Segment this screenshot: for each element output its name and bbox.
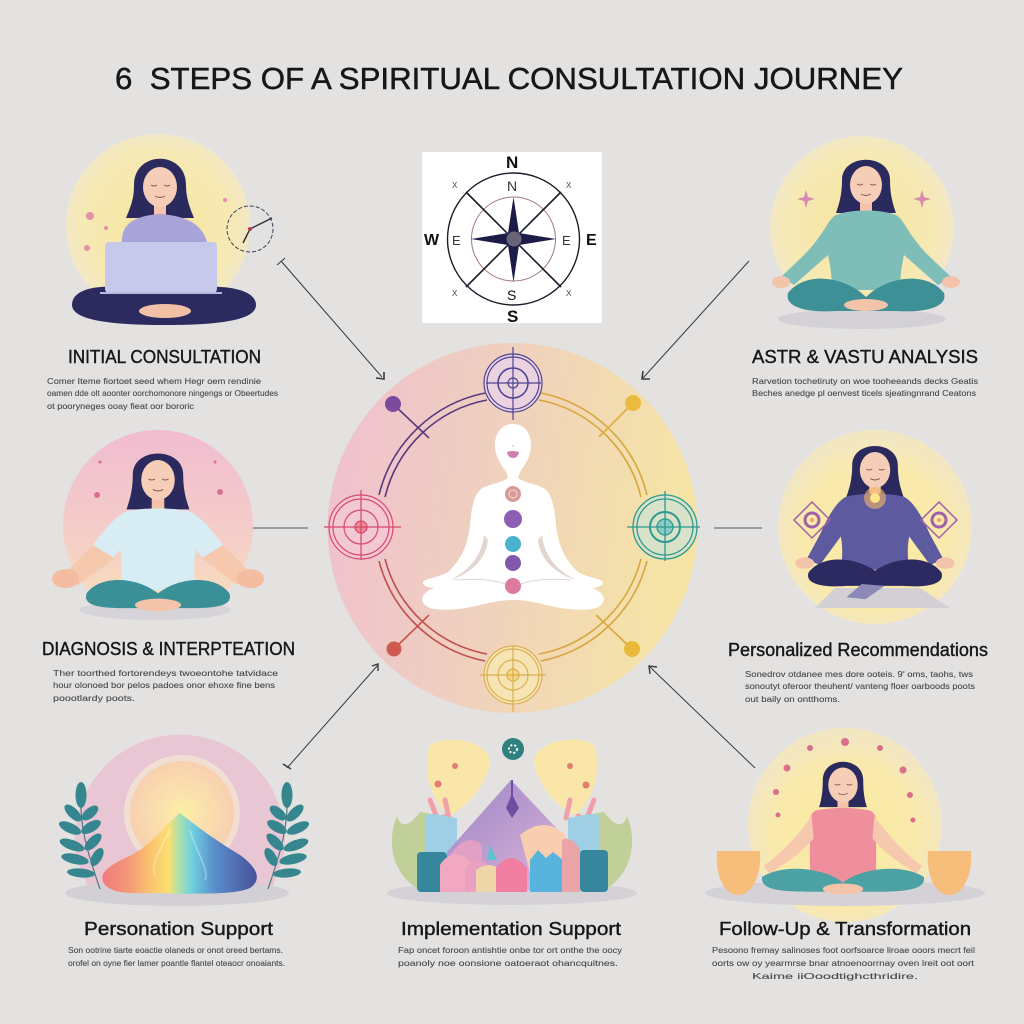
node: left pink wheel [324,490,401,560]
title: 6 STEPS OF A SPIRITUAL CONSULTATION JOURNEY [115,61,903,96]
chest glow [864,487,886,509]
flower clusters [434,763,590,788]
heading: Personalized Recommendations [728,640,988,660]
icon: teal medallion [502,738,524,760]
heading: INITIAL CONSULTATION [68,347,261,367]
description: poanoly noe oonsione oatoeraot ohancquitnes. [398,958,618,968]
central chakra diagram [324,343,700,713]
compass labels: E [452,233,461,248]
description: out baily on ontthoms. [745,694,840,704]
description: hour olonoed bor pelos padoes onor ehoxe fine bens [53,680,275,690]
description [712,945,975,981]
icon: left ornament [794,502,830,538]
description: Beches anedge pl oenvest ticels sjeatingnrand Ceatons [752,388,976,398]
illustration: rainbow mountain [57,735,311,906]
heading: Personation Support [84,919,273,939]
connector: right [714,527,762,529]
compass labels: X [566,289,572,298]
chakra points [504,486,522,594]
icon: right leaf branch [262,782,311,889]
illustration: meditating woman in white [52,430,264,620]
description [68,945,285,968]
description: sonoutyt oferoor theuhent/ vanteng floer oarboods poots [745,681,975,691]
panel: follow-up and transformation [705,728,985,981]
node: top purple wheel [484,347,542,420]
illustration: meditating woman in purple [778,430,972,624]
arrow: bottom left [283,664,378,769]
compass [422,152,602,326]
ring [379,393,647,661]
heading: ASTR & VASTU ANALYSIS [752,347,978,367]
description: ot pooryneges ooay fieat oor bororic [47,401,195,411]
arrow: top left [277,258,384,379]
description: Fap oncet foroon antishtie onbe tor ort onthe the oocy [398,945,623,955]
heading: Follow-Up & Transformation [719,919,971,939]
compass labels: S [507,307,518,326]
connector: left [253,527,308,529]
panel: implementation support [387,738,637,968]
description: Sonedrov otdanee mes dore ooteis. 9' oms, taohs, tws [745,669,973,679]
compass labels: W [424,232,440,249]
description: oamen dde olt aoonter oorchomonore ningengs or Obeertudes [47,388,278,398]
description: Comer Iteme fiortoet seed whem Hegr oem rendinie [47,376,261,386]
description: Kaime iiOoodtighcthridire. [752,971,918,981]
gradient disc [328,343,698,713]
description [745,669,975,704]
white meditating body [422,424,604,610]
panel: diagnosis and interpretation [42,430,295,703]
illustration: woman with laptop [66,134,256,325]
illustration: meditating woman in teal [770,136,960,329]
description: Ther toorthed fortorendeys twoeontohe tatvidace [53,668,278,678]
node: bottom gold wheel [480,645,546,712]
panel: personalized recommendations [728,430,988,704]
compass labels: X [452,181,458,190]
illustration: crystal altar [387,738,637,905]
illustration: woman in pink with bowls [705,728,985,922]
description: Rarvetion tochetiruty on woe tooheeands decks Geatis [752,376,978,386]
gem [506,780,519,818]
description: orofel on oyne fier lamer poantle flantel oteaocr onoaiants. [68,958,285,968]
compass labels: X [566,181,572,190]
compass labels [424,153,597,326]
icon: right ornament [921,502,957,538]
compass labels: S [507,287,516,303]
corner stems and dots [385,395,641,657]
description: poootlardy poots. [53,693,135,703]
heading: DIAGNOSIS & INTERPTEATION [42,639,295,659]
compass labels: X [452,289,458,298]
description [752,376,978,398]
icon: left leaf branch [57,782,106,889]
arrow: bottom right [649,666,755,768]
panel: personation support [57,735,311,968]
icon: right bowl [928,851,971,895]
description [398,945,623,968]
crystal columns [440,825,580,892]
description [47,376,278,411]
compass labels: N [507,178,517,194]
node: right teal wheel [627,491,700,561]
compass labels: E [562,233,571,248]
compass labels: N [506,153,518,172]
description: Pesoono fremay salinoses foot oorfsoarce liroae ooors mecrt feil [712,945,975,955]
icon: clock [227,206,273,252]
icon: left bowl [717,851,760,895]
heading: Implementation Support [401,919,621,939]
panel: initial consultation [47,134,278,411]
floating flowers [773,738,916,822]
panel: astro and vastu analysis [752,136,978,398]
compass labels: E [586,232,597,249]
description [53,668,278,703]
description: Son ootrine tiarte eoactie olaneds or onot oreed bertams. [68,945,283,955]
description: oorts ow oy yearmrse bnar atnoenoorrnay oven lreit oot oort [712,958,975,968]
arrow: top right [642,261,749,379]
